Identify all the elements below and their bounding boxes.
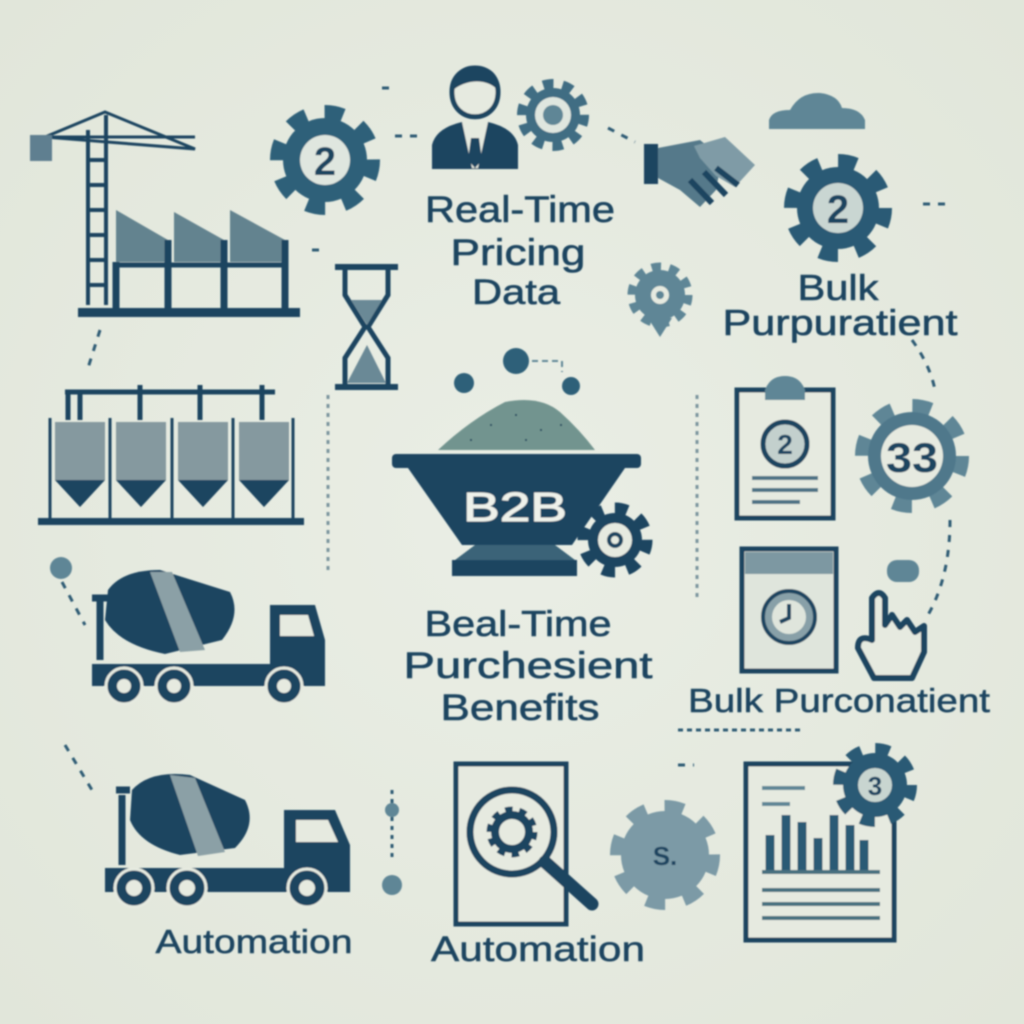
icon: report gear 3: 3 (868, 771, 882, 801)
icon: factory (78, 210, 300, 317)
heading: real-time pricing data (425, 189, 615, 312)
heading: bulk purpuratient (722, 267, 958, 343)
icon: mixer truck lower (105, 774, 350, 907)
icon: central B2B bowl: B2B (463, 484, 567, 530)
icon: gear dollar: S. (653, 841, 677, 871)
icon: businessman (432, 66, 518, 169)
icon: tablet (742, 549, 836, 671)
text: automation centre: Automation (431, 930, 645, 969)
heading: real-time purchesient benefits: Benefits (440, 687, 600, 728)
icon: gear 33 (864, 408, 960, 504)
icon: gear 2 left (279, 114, 371, 206)
text: bulk purconatient: Bulk Purconatient (688, 682, 990, 719)
icon: gear top centre (523, 85, 583, 145)
icon: handshake (644, 137, 755, 207)
heading: real-time pricing data: Real-Time (425, 189, 615, 230)
heading: real-time purchesient benefits (404, 603, 653, 728)
connector: dashed links (62, 88, 950, 860)
icon: report chart (746, 764, 894, 940)
icon: bowl gear (585, 510, 645, 570)
icon: construction crane (30, 112, 195, 305)
heading: real-time purchesient benefits: Purchesient (404, 645, 653, 686)
heading: real-time purchesient benefits: Beal-Time (424, 603, 612, 644)
heading: real-time pricing data: Data (472, 273, 561, 312)
heading: bulk purpuratient: Purpuratient (722, 302, 958, 343)
icon: hourglass (335, 267, 398, 387)
icon: document with magnifier (456, 764, 592, 924)
heading: real-time pricing data: Pricing (450, 232, 586, 273)
icon: gear 2 right: 2 (827, 188, 849, 232)
heading: bulk purpuratient: Bulk (798, 267, 880, 308)
marker: connector dots (50, 557, 919, 895)
icon: gear 2 left: 2 (314, 140, 336, 184)
icon: gear 2 right (793, 163, 883, 253)
icon: mixer truck upper (92, 570, 325, 704)
icon: cloud (769, 93, 865, 129)
icon: pointer hand (858, 593, 924, 678)
text: automation left: Automation (156, 923, 352, 960)
icon: gear dollar (619, 809, 711, 901)
icon: location gear (633, 268, 687, 337)
icon: clipboard (737, 376, 833, 518)
icon: silos (38, 385, 304, 525)
icon: gear 33: 33 (886, 434, 938, 481)
icon: report gear 3 (841, 751, 909, 819)
icon: central B2B bowl (392, 348, 641, 576)
icon: clipboard: 2 (777, 429, 793, 460)
